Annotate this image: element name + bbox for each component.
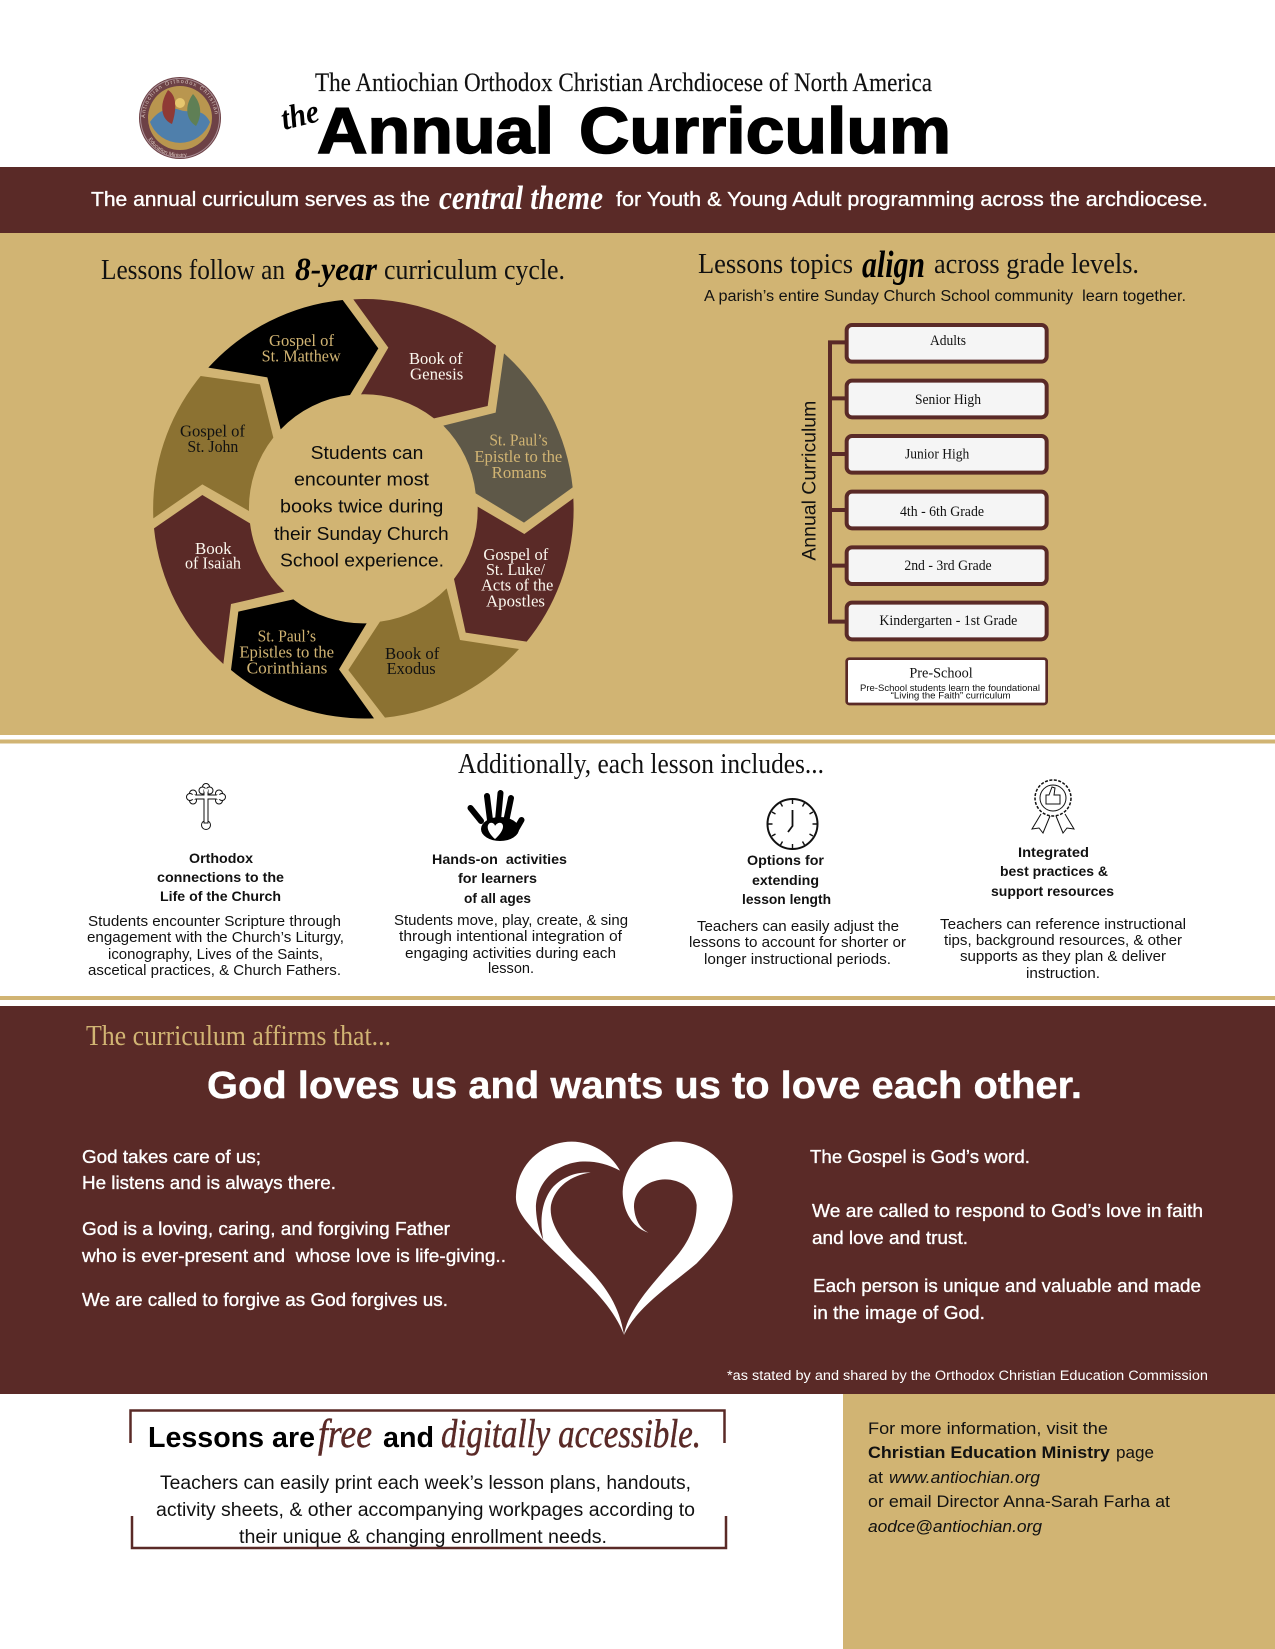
body: activity sheets, & other accompanying workpages according to [156,1500,695,1521]
heading: align across grade levels [698,244,1139,286]
segment: Book of Exodus: Book of [385,644,440,663]
heading text: Orthodox [189,850,253,866]
footnote: *as stated by and shared by the Orthodox Christian Education Commission [727,1368,1208,1383]
box: 4th - 6th Grade: 4th - 6th Grade [900,504,984,520]
chart: grade level tree [800,325,1047,704]
heading: align across grade levels: Lessons topics [698,248,853,280]
panel: more information: www.antiochian.org [889,1468,1041,1487]
segment: Gospel of St. John [153,376,273,518]
body text [394,912,628,977]
center text: Students can [311,442,423,463]
body text: lessons to account for shorter or [689,934,906,951]
segment: Book of Isaiah: of Isaiah [185,553,242,572]
gold divider top [0,740,1275,744]
center text: books twice during [280,496,443,517]
segment: Corinthians: Corinthians [247,659,327,678]
segment: Corinthians: St. Paul’s [258,627,316,646]
segment: Luke and Acts: Apostles [486,592,545,611]
main statement: God loves us and wants us to love each other. [207,1065,1082,1107]
heading text: Options for [747,852,825,868]
panel: free and digitally accessible [130,1410,726,1548]
box: Pre-School: “Living the Faith” curriculum [891,691,1011,701]
logo [139,77,221,159]
body text: ascetical practices, & Church Fathers. [88,962,341,979]
logo: Antiochian Orthodox Christian [141,79,218,118]
body: their unique & changing enrollment needs. [239,1527,607,1548]
segment: Book of Genesis [353,299,496,418]
subheading: community: A parish’s entire Sunday Church School community learn together. [704,288,1186,305]
segment: Gospel of St. John: Gospel of [180,422,245,441]
panel: more information: or email Director Anna-Sarah Farha at [868,1492,1170,1511]
right statements: We are called to respond to God’s love in faith [812,1200,1203,1221]
label: Annual Curriculum axis: Annual Curriculum [800,401,821,561]
heading text [742,852,831,907]
segment: Romans [443,353,573,523]
heading: Lessons are [148,1422,315,1454]
box: Pre-School: Pre-School [909,666,973,682]
banner: central theme: central theme [439,180,603,217]
chart: 8-year cycle wheel [153,299,574,719]
panel: more information: page [1116,1443,1154,1462]
panel: more information: For more information, visit the [868,1419,1108,1438]
icon: award ribbon [1032,780,1074,833]
center text [274,442,449,571]
box: 4th - 6th Grade [847,492,1047,528]
right statements: Each person is unique and valuable and made [813,1275,1201,1296]
segment: Gospel of St. Matthew: Gospel of [269,331,334,350]
box: 2nd - 3rd Grade [847,547,1047,584]
heading text: lesson length [742,891,831,907]
body text: engagement with the Church’s Liturgy, [87,929,344,946]
banner: central theme: The annual curriculum serves as the [91,188,430,211]
center text: encounter most [294,469,430,490]
heading text: of all ages [464,890,531,906]
heading: 8-year cycle: 8-year [295,252,378,288]
left statements: God is a loving, caring, and forgiving Father [82,1218,450,1239]
segment: Book of Isaiah [154,495,284,664]
logo: Education Ministry [148,137,186,158]
segment: Book of Exodus [348,588,519,718]
column: Orthodox connections [87,784,344,979]
banner: central theme [0,167,1275,233]
segment: Gospel of St. Matthew: St. Matthew [262,347,341,366]
heading: additionally: Additionally, each lesson includes... [458,749,824,780]
segment: Corinthians [231,599,374,719]
heading text: support resources [991,883,1114,899]
body text: tips, background resources, & other [944,932,1182,949]
panel: more information: at [868,1468,883,1487]
heading text: Integrated [1018,844,1089,860]
icon: clock [768,799,818,849]
box: Pre-School: Pre-School students learn the foundational [860,683,1040,693]
heading [148,1411,701,1456]
right statements: The Gospel is God’s word. [810,1146,1030,1167]
box: Junior High: Junior High [905,446,970,462]
center text: their Sunday Church [274,523,449,544]
body text [940,916,1186,982]
segment: Romans: Romans [492,463,547,482]
right statements [810,1146,1203,1323]
right statements: in the image of God. [813,1302,985,1323]
body text: instruction. [1026,965,1100,982]
body text: engaging activities during each [405,945,616,962]
heading text: best practices & [1000,863,1108,879]
body text: lesson. [488,960,534,977]
box: Pre-School [847,659,1047,704]
heading: and [383,1422,434,1454]
left statements: God takes care of us; [82,1146,261,1167]
left statements: He listens and is always there. [82,1172,336,1193]
body text: Students encounter Scripture through [88,913,341,930]
icon: orthodox cross [186,784,226,830]
heading text: for learners [458,870,537,886]
segment: Book of Genesis: Book of [409,349,463,368]
right statements: and love and trust. [812,1227,968,1248]
box: Senior High: Senior High [915,392,982,408]
segment: Luke and Acts: St. Luke/ [486,560,545,579]
segment: Gospel of St. John: St. John [187,437,239,456]
left statements: We are called to forgive as God forgives us. [82,1289,448,1310]
segment: Gospel of St. Matthew [208,300,378,429]
title block: the [277,94,323,138]
panel: curriculum affirms [0,1006,1275,1394]
body text [87,913,344,979]
box: 2nd - 3rd Grade: 2nd - 3rd Grade [904,558,992,574]
body text: longer instructional periods. [704,951,891,968]
column: Hands-on activities [394,793,628,977]
heading: 8-year cycle: curriculum cycle. [384,255,565,286]
heading text: Hands-on activities [432,851,567,867]
box: Senior High [847,381,1047,417]
subheading: The curriculum affirms that... [86,1021,391,1052]
center text: School experience. [280,550,444,571]
box: Junior High [847,436,1047,473]
heading text [157,850,284,904]
left statements [81,1146,506,1310]
heading: free [318,1411,372,1456]
heading: align across grade levels: across grade levels. [934,248,1139,280]
box: Adults: Adults [930,333,966,349]
icon: heart [516,1142,733,1335]
heading: digitally accessible. [441,1411,701,1456]
body text: iconography, Lives of the Saints, [108,946,323,963]
left statements: who is ever-present and whose love is life-giving.. [81,1245,506,1266]
panel: more information: Christian Education Ministry [868,1443,1111,1462]
heading text [991,844,1114,899]
segment: Luke and Acts: Acts of the [481,576,553,595]
gold divider bottom [0,996,1275,1000]
segment: Romans: Epistle to the [474,447,562,466]
segment: Romans: St. Paul’s [489,431,548,450]
banner: central theme: for Youth & Young Adult programming across the archdiocese. [616,188,1208,211]
body text: Teachers can reference instructional [940,916,1186,933]
body text: Students move, play, create, & sing [394,912,628,929]
body: Teachers can easily print each week’s lesson plans, handouts, [160,1473,691,1494]
title block: Annual [317,94,554,167]
heading: 8-year cycle [101,252,565,288]
heading: 8-year cycle: Lessons follow an [101,255,285,286]
heading text [432,851,567,906]
box: Kindergarten - 1st Grade [847,603,1047,639]
body text: Teachers can easily adjust the [697,918,899,935]
box: Kindergarten - 1st Grade: Kindergarten - 1st Grade [879,613,1017,629]
segment: Luke and Acts: Gospel of [483,545,549,564]
heading text: connections to the [157,869,284,885]
body [156,1473,695,1548]
title block [277,68,951,167]
segment: Book of Exodus: Exodus [387,659,436,678]
heading text: Life of the Church [160,888,281,904]
column: Integrated best practices [940,780,1186,982]
panel: more information: aodce@antiochian.org [868,1517,1043,1536]
segment: Corinthians: Epistles to the [239,643,334,662]
column: Options for extending [689,799,906,968]
connector spine [830,342,847,622]
heading text: extending [752,872,819,888]
body text: supports as they plan & deliver [960,948,1166,965]
panel: gold curriculum section [0,233,1275,735]
segment: Book of Genesis: Genesis [410,364,463,383]
panel: more information [843,1394,1275,1649]
segment: Luke and Acts [454,498,574,642]
icon: hand print [470,793,522,841]
body text [689,918,906,968]
bracket bottom [132,1516,726,1548]
body text: through intentional integration of [399,928,623,945]
title block: Curriculum [579,94,951,167]
segment: Book of Isaiah: Book [195,539,232,558]
heading: align across grade levels: align [862,244,925,286]
title block: The Antiochian Orthodox Christian Archdiocese of North America [315,68,932,97]
bracket top [130,1410,724,1443]
box: Adults [847,325,1047,362]
